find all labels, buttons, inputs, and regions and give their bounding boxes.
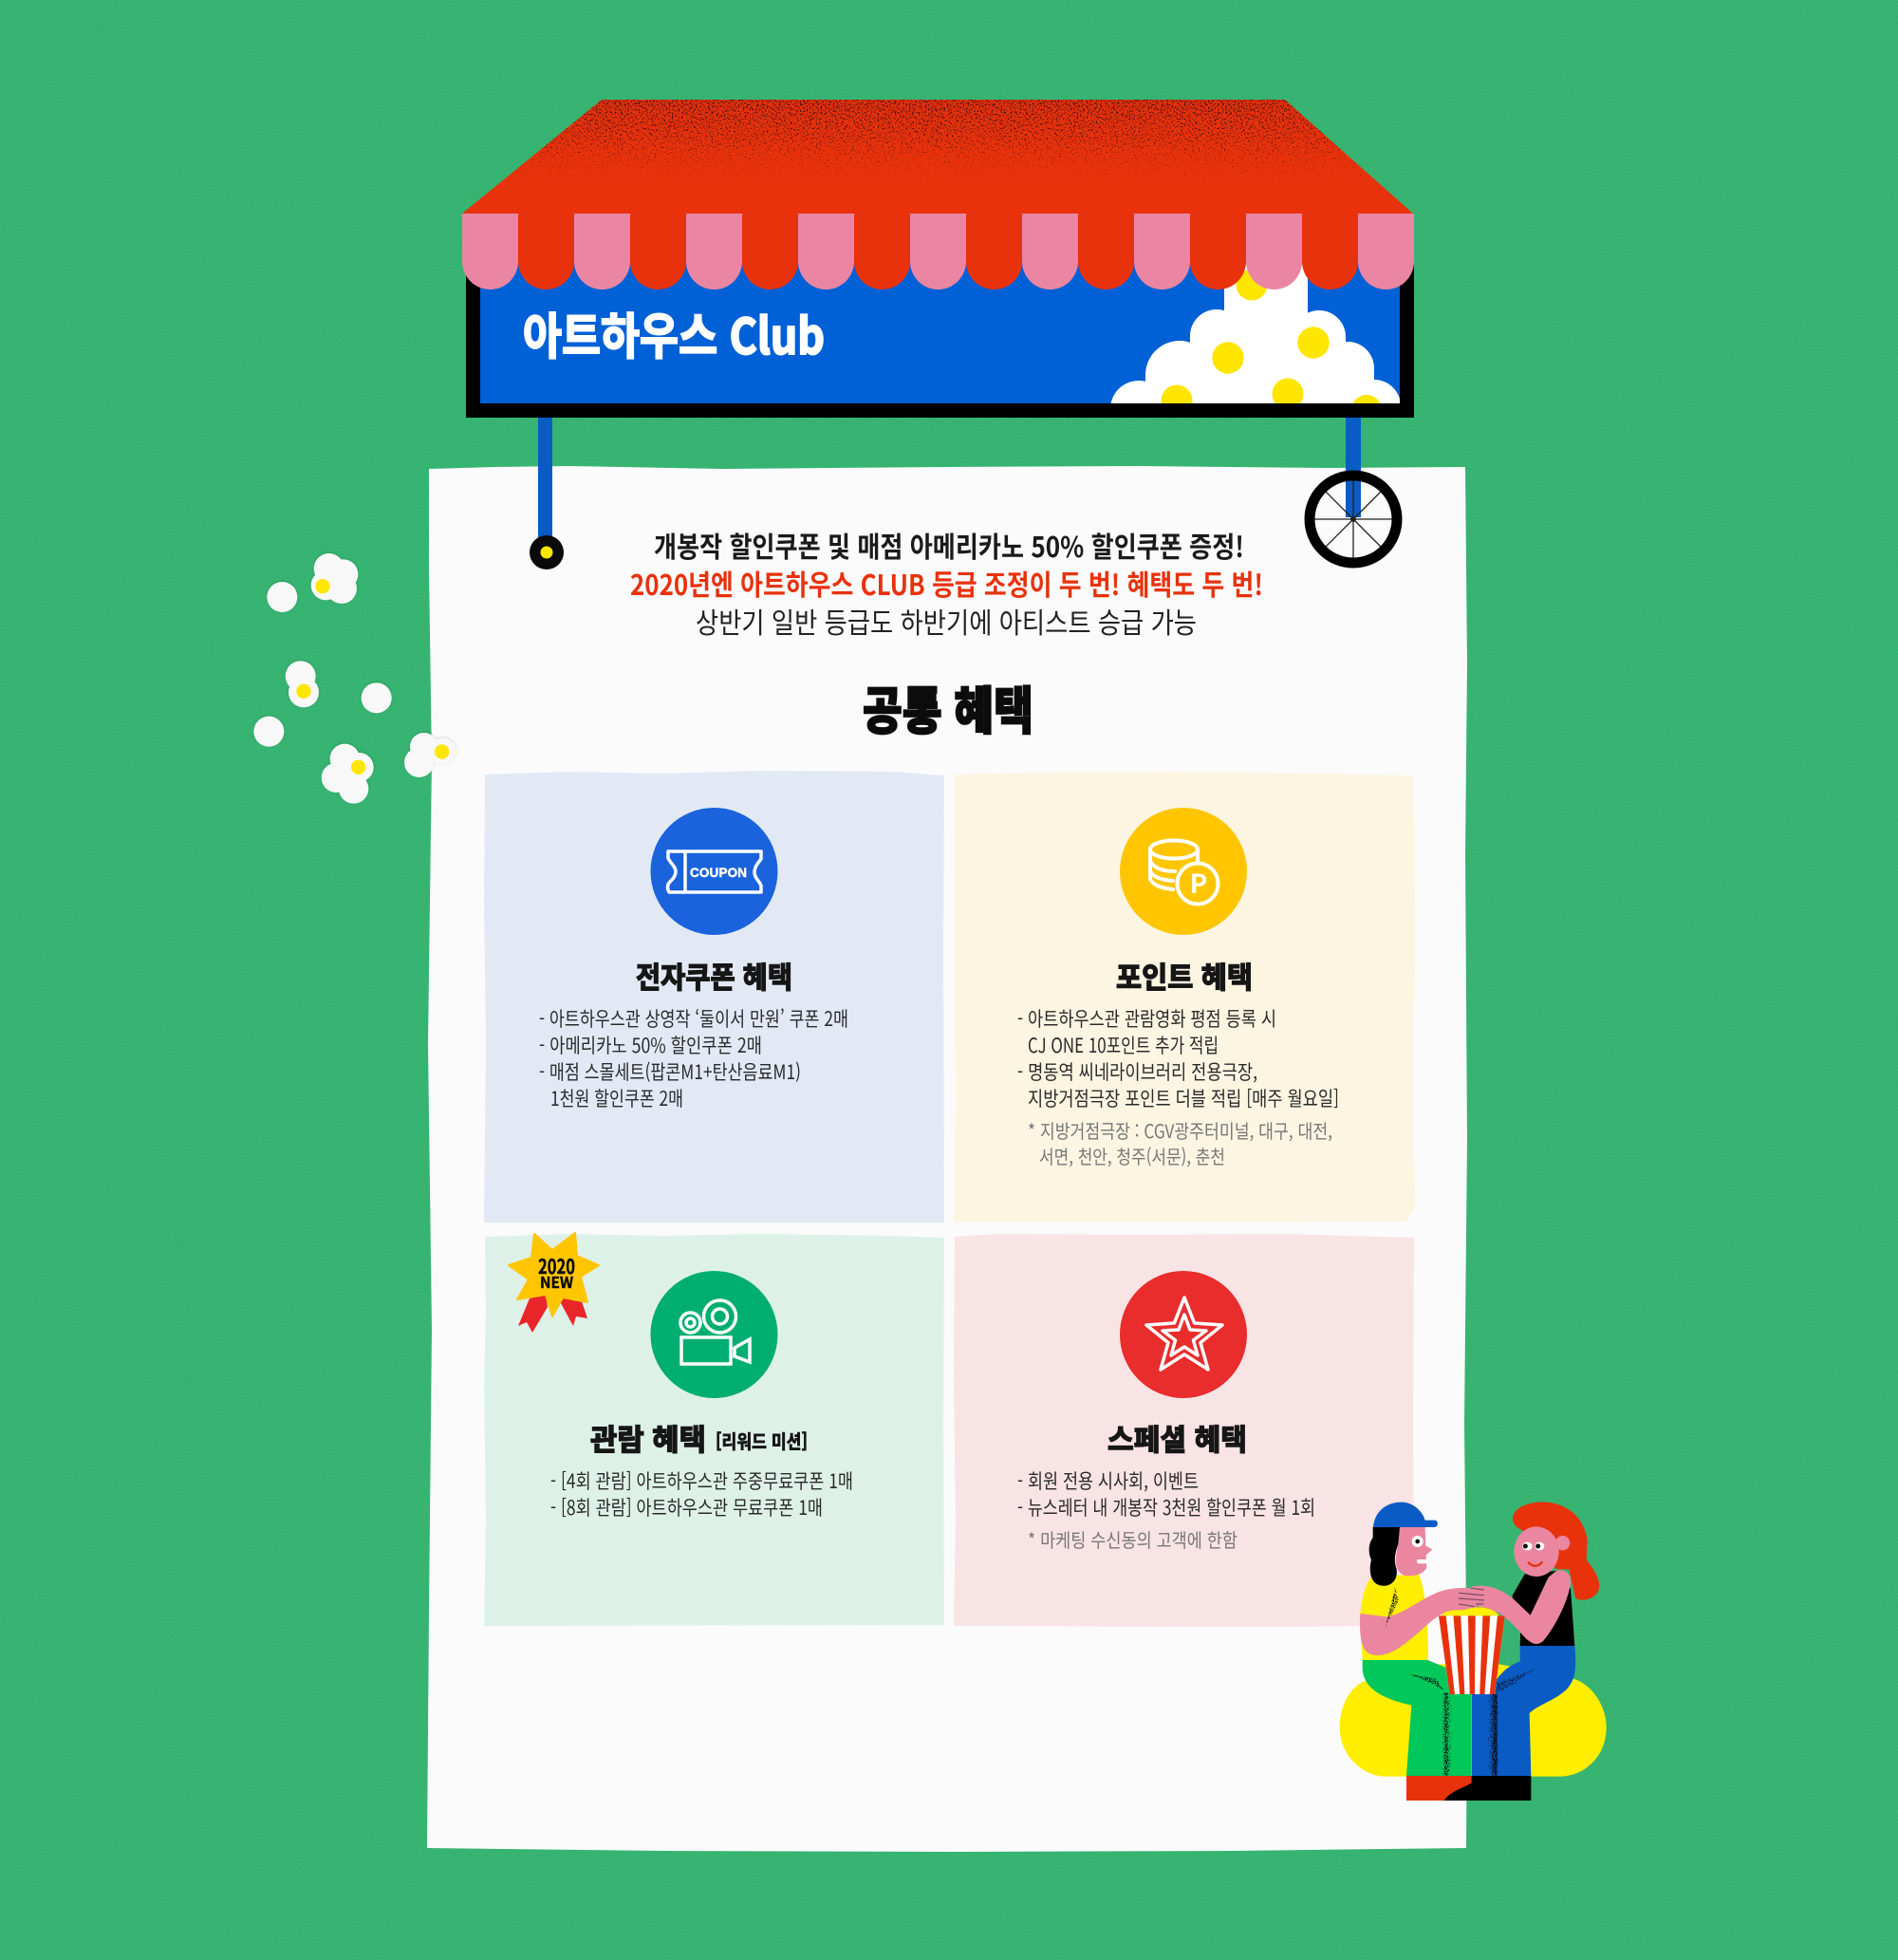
list: 서면, 천안, 청주(서문), 춘천 [1039, 1142, 1225, 1169]
list [1017, 1004, 1339, 1169]
signboard title: 아트하우스 Club [523, 297, 825, 368]
beanbag [1340, 1664, 1607, 1777]
icon: points: P [1190, 864, 1207, 902]
badge: 2020 new: 2020 [538, 1252, 575, 1280]
icon: movie camera [651, 1271, 778, 1398]
title: 관람 혜택 [590, 1416, 706, 1459]
title [590, 1416, 808, 1459]
list [1017, 1466, 1315, 1553]
right person [1471, 1503, 1599, 1776]
awning scallops [462, 214, 1414, 289]
title: 스페셜 혜택 [1107, 1416, 1247, 1459]
cart: awning [462, 100, 1414, 289]
panel: intro text: 상반기 일반 등급도 하반기에 아티스트 승급 가능 [696, 600, 1197, 642]
panel: viewing benefits [484, 1233, 944, 1626]
list [539, 1004, 848, 1112]
panel: intro text: 개봉작 할인쿠폰 및 매점 아메리카노 50% 할인쿠폰 증정! [654, 524, 1244, 566]
list: CJ ONE 10포인트 추가 적립 [1028, 1031, 1219, 1059]
icon: coupon [651, 808, 778, 935]
cart: left pole and small wheel [530, 418, 564, 569]
list: - 명동역 씨네라이브러리 전용극장, [1017, 1057, 1257, 1086]
popcorn scatter [253, 553, 456, 804]
panel: coupon benefits [484, 771, 944, 1223]
finger details [1459, 1588, 1484, 1607]
list: * 지방거점극장 : CGV광주터미널, 대구, 대전, [1028, 1116, 1332, 1144]
list: - 매점 스몰세트(팝콘M1+탄산음료M1) [539, 1057, 801, 1086]
badge: 2020 new [509, 1233, 599, 1333]
popcorn bucket [1439, 1607, 1505, 1694]
list: - [4회 관람] 아트하우스관 주중무료쿠폰 1매 [550, 1466, 853, 1495]
cart: right pole and wheel [1307, 418, 1400, 566]
panel: intro text: 2020년엔 아트하우스 CLUB 등급 조정이 두 번! 혜택도 두 번! [630, 562, 1263, 604]
badge: 2020 new: NEW [540, 1270, 573, 1293]
list: - 아트하우스관 상영작 ‘둘이서 만원’ 쿠폰 2매 [539, 1004, 848, 1033]
shoes [1406, 1776, 1531, 1801]
title: 포인트 혜택 [1116, 954, 1253, 997]
list: - 회원 전용 시사회, 이벤트 [1017, 1466, 1199, 1495]
title: 전자쿠폰 혜택 [636, 954, 792, 997]
icon: points [1120, 808, 1247, 935]
popcorn pile [1110, 262, 1400, 403]
list: 지방거점극장 포인트 더블 적립 [매주 월요일] [1028, 1084, 1339, 1112]
heading: common benefits: 공통 혜택 [863, 669, 1033, 744]
illustration: couple sharing popcorn [1340, 1503, 1607, 1801]
panel: point benefits [954, 772, 1415, 1223]
list: - 뉴스레터 내 개봉작 3천원 할인쿠폰 월 1회 [1017, 1493, 1315, 1521]
panel: intro text [630, 524, 1263, 642]
title: [리워드 미션] [716, 1427, 808, 1454]
icon: star [1120, 1271, 1247, 1398]
list: - [8회 관람] 아트하우스관 무료쿠폰 1매 [550, 1493, 823, 1521]
left person [1360, 1503, 1478, 1776]
panel: paper sheet [427, 466, 1467, 1852]
list: 1천원 할인쿠폰 2매 [550, 1084, 683, 1112]
list: - 아트하우스관 관람영화 평점 등록 시 [1017, 1004, 1276, 1033]
cart: signboard [466, 262, 1414, 418]
list: - 아메리카노 50% 할인쿠폰 2매 [539, 1031, 762, 1059]
panel: special benefits [954, 1234, 1414, 1627]
list: * 마케팅 수신동의 고객에 한함 [1028, 1525, 1237, 1553]
list [550, 1466, 853, 1521]
icon: coupon: COUPON [690, 866, 747, 880]
